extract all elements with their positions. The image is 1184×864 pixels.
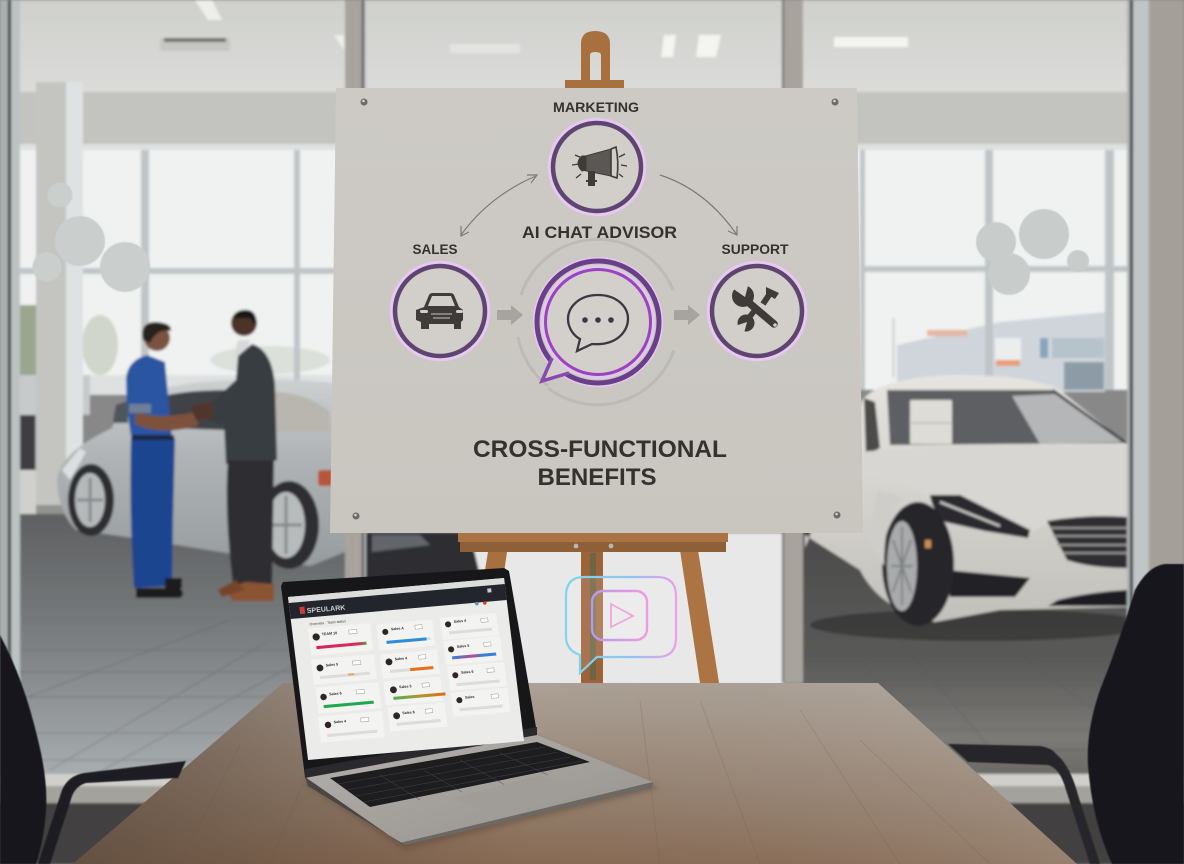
window mullions <box>20 150 1128 390</box>
ceiling <box>0 0 1184 100</box>
title: CROSS-FUNCTIONAL <box>473 436 727 463</box>
label: sales: SALES <box>412 242 458 257</box>
dashboard header: SPEULARK <box>307 605 346 615</box>
mechanic in blue <box>126 322 198 598</box>
dashboard cards: Sales 5 <box>457 644 469 649</box>
dashboard cards: Sales 4 <box>394 656 407 661</box>
floor left <box>20 514 350 776</box>
laptop screen dashboard <box>288 578 524 760</box>
icon: floating video chat <box>566 577 676 673</box>
windows <box>20 150 1128 390</box>
label: support: SUPPORT <box>722 242 789 257</box>
easel <box>458 31 728 683</box>
table <box>73 683 1077 864</box>
icon: wrench and screwdriver <box>732 282 779 337</box>
keyboard <box>330 742 590 807</box>
table wood grain <box>180 700 990 864</box>
dashboard cards: Sales A <box>391 626 405 631</box>
distant trees and lot <box>20 305 336 475</box>
laptop <box>281 568 660 850</box>
chair right <box>948 564 1184 864</box>
easel top clip <box>565 31 624 93</box>
board screws <box>352 98 840 520</box>
floor right <box>800 520 1130 776</box>
icon: megaphone <box>572 147 627 186</box>
trackpad <box>453 775 580 817</box>
light floor behind easel <box>364 533 784 685</box>
dashboard cards: TEAM 10 <box>322 631 337 636</box>
right white car <box>805 375 1150 641</box>
curved arrow sales to marketing <box>461 175 537 236</box>
dashboard cards: Sales <box>465 695 475 700</box>
central chat ring <box>518 239 674 405</box>
frosted glass decals right <box>976 209 1089 295</box>
sign board <box>330 88 863 533</box>
easel shelf <box>458 531 728 552</box>
left silver car <box>57 379 345 569</box>
ceiling lights and vent <box>160 0 908 57</box>
laptop base <box>305 735 653 843</box>
label: marketing: MARKETING <box>553 100 639 115</box>
icon: chat bubble <box>568 295 628 351</box>
dark car shadow behind easel <box>364 533 480 590</box>
icon: car <box>416 293 463 329</box>
dashboard cards: Sales 4 <box>334 719 346 724</box>
dashboard cards <box>307 612 512 743</box>
floor tile lines <box>20 620 1128 780</box>
browser bar <box>288 578 505 603</box>
chair left <box>0 635 186 864</box>
man in dark suit <box>190 310 277 601</box>
support circle <box>708 262 806 360</box>
title: BENEFITS <box>538 464 656 491</box>
arrow centre to support <box>674 305 700 325</box>
speech tail <box>542 358 569 381</box>
dashboard header <box>289 584 507 622</box>
dashboard cards: Sales 4 <box>454 619 466 624</box>
laptop lid <box>281 568 537 777</box>
lower wall strip and dark floor <box>0 774 1184 864</box>
curved arrow marketing to support <box>660 175 737 235</box>
easel legs <box>480 550 719 683</box>
arrow sales to centre <box>497 305 523 325</box>
dashboard cards: Sales 5 <box>325 662 338 667</box>
outer arcs <box>518 239 674 405</box>
heading: AI chat advisor: AI CHAT ADVISOR <box>522 223 677 242</box>
dashboard cards: Sales 6 <box>402 710 415 715</box>
back wall band <box>20 92 1128 144</box>
laptop shadow <box>302 738 660 850</box>
centre glass mullions <box>345 0 803 683</box>
title <box>473 436 727 491</box>
dashboard cards: Sales 6 <box>329 691 342 696</box>
distant building <box>892 312 1105 392</box>
breadcrumb: Overview · Team status <box>309 619 346 626</box>
dashboard cards: Sales 6 <box>461 670 474 675</box>
sales circle <box>392 262 488 360</box>
showroom column <box>36 82 83 517</box>
marketing circle <box>550 120 644 214</box>
dashboard cards: Sales 5 <box>399 684 412 689</box>
frosted glass decals left <box>32 182 150 292</box>
